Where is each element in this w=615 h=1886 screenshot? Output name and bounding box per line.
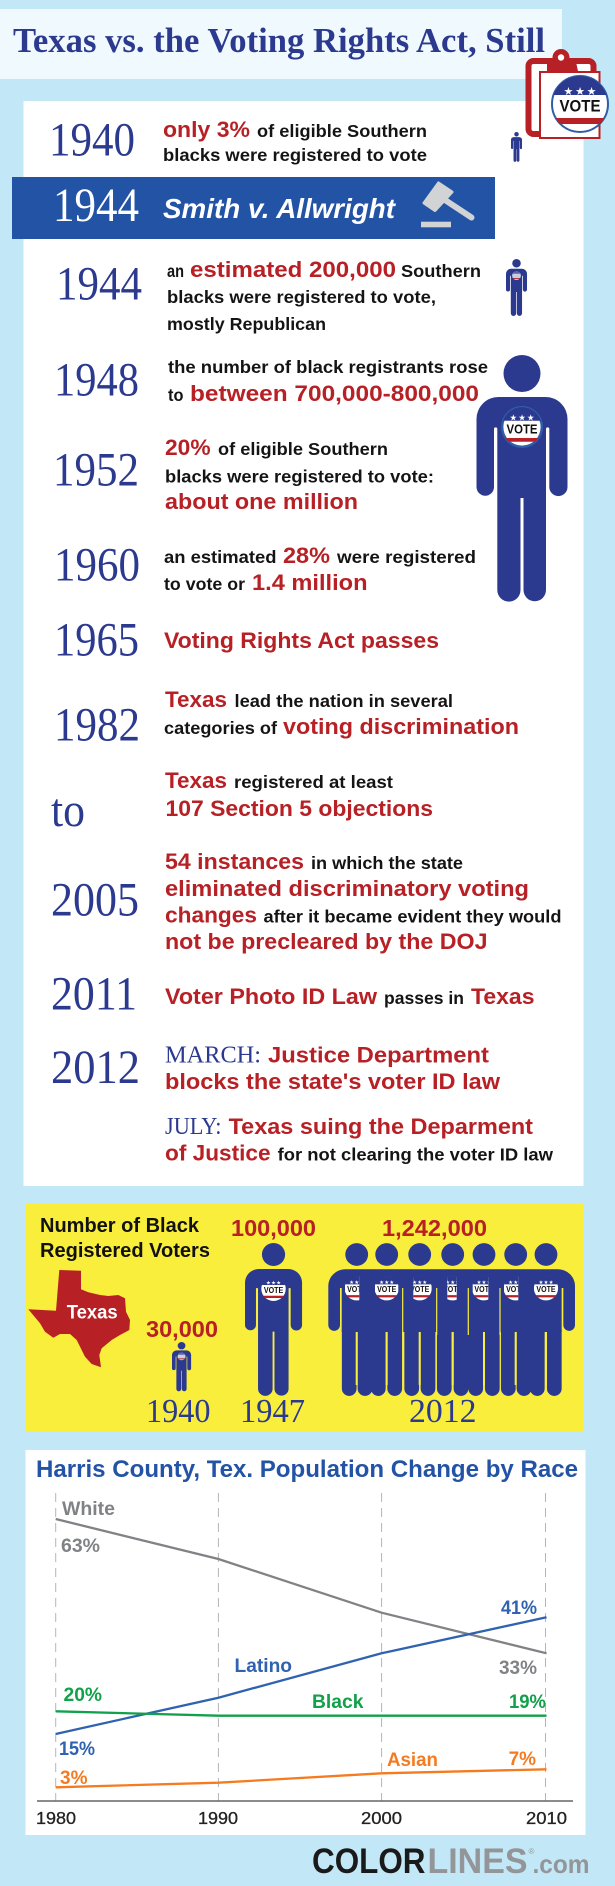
row: 1982 to 2005: to [51, 784, 85, 837]
row: 1952 [53, 435, 434, 514]
row: 1940 [49, 114, 427, 166]
figure: 1940 voters: 1940 [146, 1393, 210, 1430]
row: 2011: Texas [471, 984, 534, 1009]
logo: Colorlines [312, 1842, 590, 1881]
row: 1944: an [167, 261, 184, 281]
series: Black: Black [312, 1691, 364, 1713]
row: 1940: of eligible Southern [257, 121, 427, 141]
figure: 2012 voters: ★★★ [379, 1280, 394, 1286]
row: 1952: 20% [165, 435, 211, 460]
figure: 2012 voters: ★★★ [539, 1280, 554, 1286]
row: 1982 to 2005: categories of [164, 718, 277, 738]
row: 1982 to 2005: 107 Section 5 objections [166, 796, 433, 821]
row: 1952: blacks were registered to vote: [165, 467, 434, 487]
figure: 2012 voters: VOTE [474, 1285, 494, 1294]
x-axis labels: 2000 [361, 1808, 402, 1828]
series: White: White [62, 1498, 115, 1520]
row: 1982 to 2005: 2005 [51, 874, 139, 926]
panel: number of black registered voters [26, 1203, 584, 1432]
row: 1948: the number of black registrants rose [168, 357, 488, 377]
icon: vote clipboard: ★★★ [564, 85, 597, 98]
figure: 2012 voters: ★★★ [349, 1280, 364, 1286]
row: 1960: 28% [283, 543, 330, 568]
figure: 2012 voters: VOTE [536, 1285, 556, 1294]
banner: Smith v. Allwright: 1944 [53, 179, 139, 232]
banner: Smith v. Allwright [12, 177, 495, 239]
map: Texas: Texas [67, 1301, 118, 1323]
title banner [0, 9, 562, 79]
row: 2012 [51, 1041, 553, 1166]
row: 1944: blacks were registered to vote, [167, 287, 436, 307]
row: 1944: mostly Republican [167, 314, 326, 334]
series: White [56, 1498, 546, 1679]
figure: 2012 voters: 2012 [409, 1393, 476, 1430]
series: Black [56, 1684, 546, 1716]
map: Texas [28, 1270, 130, 1367]
figure: 2012 voters: VOTE [443, 1285, 463, 1294]
logo: Colorlines: LINES [428, 1842, 528, 1881]
figure: 2012 voters: VOTE [410, 1285, 430, 1294]
row: 1982 to 2005: changes [165, 903, 257, 928]
figure: 1947 voters: VOTE [264, 1286, 284, 1295]
row: 2011: passes in [384, 988, 464, 1008]
panel: Harris County line chart [26, 1450, 586, 1835]
row: 1952: 1952 [53, 444, 139, 496]
figure: 1940 voters [146, 1316, 218, 1430]
row: 1960: 1960 [54, 538, 140, 592]
row: 2012: for not clearing the voter ID law [278, 1145, 553, 1165]
series: Asian: Asian [387, 1749, 438, 1771]
row: 1982 to 2005: 1982 [54, 698, 140, 752]
row: 2012: blocks the state's voter ID law [165, 1069, 501, 1094]
logo: Colorlines: ® [528, 1847, 534, 1856]
figure: 1947 voters: 100,000 [231, 1215, 316, 1241]
row: 1960: were registered [336, 547, 476, 567]
row: 1982 to 2005: voting discrimination [283, 714, 519, 739]
series: White: 63% [61, 1535, 100, 1557]
icon: vote clipboard: VOTE [560, 97, 600, 116]
icon: large voter [476, 355, 568, 602]
row: 2012: MARCH: [165, 1043, 261, 1069]
row: 1982 to 2005: 54 instances [165, 849, 304, 874]
icon: large voter: VOTE [506, 421, 538, 436]
figure: 2012 voters: VOTE [377, 1285, 397, 1294]
row: 1960 [54, 538, 476, 595]
figure: 2012 voters: VOTE [347, 1285, 367, 1294]
row: 1982 to 2005: lead the nation in several [234, 691, 453, 711]
row: 1944: 1944 [56, 258, 142, 310]
row: 2011: 2011 [51, 968, 137, 1020]
logo: Colorlines: COLOR [312, 1842, 426, 1881]
figure: 2012 voters: VOTE [506, 1285, 526, 1294]
series: Latino: 15% [59, 1738, 95, 1760]
row: 2011: Voter Photo ID Law [165, 984, 378, 1009]
series: Black: 19% [509, 1691, 546, 1713]
icon: gavel [421, 183, 472, 227]
figure: 2012 voters: ★★★ [508, 1280, 523, 1286]
figure: 2012 voters: 1,242,000 [382, 1215, 487, 1241]
icon: large voter: ★★★ [510, 414, 535, 424]
icon: vote clipboard [528, 49, 608, 138]
series: Black: 20% [64, 1684, 102, 1706]
series: Asian [56, 1748, 546, 1789]
row: 1965: 1965 [54, 614, 139, 666]
row: 1982 to 2005: eliminated discriminatory voting [165, 876, 529, 901]
row: 1948: 1948 [54, 354, 139, 406]
row: 1982 to 2005: not be precleared by the DOJ [165, 929, 488, 954]
row: 1952: of eligible Southern [218, 439, 388, 459]
x-axis labels: 1980 [36, 1808, 76, 1828]
row: 2011 [51, 968, 534, 1020]
icon: small voter 1944 [506, 259, 527, 316]
row: 1982 to 2005: Texas [165, 768, 227, 793]
row: 1948: between 700,000-800,000 [190, 381, 479, 406]
row: 1944: Southern [401, 261, 481, 281]
row: 1960: to vote or [164, 574, 245, 594]
series: Latino: 41% [501, 1597, 537, 1619]
row: 1982 to 2005: Texas [165, 687, 227, 712]
row: 1948: to [168, 385, 184, 405]
x-axis labels: 2010 [526, 1808, 567, 1828]
row: 1960: an estimated [164, 547, 276, 567]
row: 1944: estimated 200,000 [190, 257, 396, 282]
x-axis labels [36, 1808, 567, 1828]
row: 2012: Texas suing the Deparment [229, 1114, 534, 1139]
figure: 1947 voters: 1947 [240, 1393, 305, 1430]
figure: 2012 voters [328, 1215, 575, 1430]
logo: Colorlines: .com [532, 1849, 590, 1879]
figure: 2012 voters: ★★★ [412, 1280, 427, 1286]
row: 1982 to 2005: registered at least [234, 772, 393, 792]
figure: 1947 voters: ★★★ [266, 1281, 281, 1287]
series: White: 33% [499, 1657, 537, 1679]
row: 1940: 1940 [49, 114, 135, 166]
icon: small voter 1940 [511, 132, 522, 162]
row: 1944 [56, 257, 481, 334]
series: Asian: 7% [509, 1748, 536, 1770]
row: 1948 [54, 354, 488, 406]
row: 2012: of Justice [165, 1141, 271, 1166]
title: Texas vs. the Voting Rights Act, Still [13, 21, 545, 60]
row: 1940: blacks were registered to vote [163, 145, 427, 165]
banner: Smith v. Allwright: Smith v. Allwright [163, 193, 397, 224]
heading: number of black registered voters: Number of Black [40, 1215, 200, 1237]
heading: number of black registered voters: Registered Voters [40, 1240, 210, 1262]
figure: 1947 voters [231, 1215, 316, 1430]
row: 2012: Justice Department [268, 1043, 490, 1068]
row: 2012: JULY: [165, 1114, 222, 1140]
series: Asian: 3% [60, 1767, 88, 1789]
figure: 2012 voters: ★★★ [477, 1280, 492, 1286]
heading: number of black registered voters [40, 1215, 210, 1262]
row: 1982 to 2005: after it became evident they would [264, 907, 562, 927]
row: 1982 to 2005 [51, 687, 562, 954]
panel: timeline [12, 101, 584, 1186]
row: 1940: only 3% [163, 117, 250, 142]
row: 1960: 1.4 million [252, 570, 368, 595]
figure: 2012 voters: ★★★ [445, 1280, 460, 1286]
row: 1965: Voting Rights Act passes [164, 628, 439, 653]
row: 1965 [54, 614, 439, 666]
figure: 1940 voters: 30,000 [146, 1316, 218, 1342]
chart title: Harris County, Tex. Population Change by Race [36, 1456, 578, 1483]
row: 1952: about one million [165, 489, 358, 514]
series: Latino [56, 1597, 546, 1760]
row: 1982 to 2005: in which the state [311, 853, 463, 873]
x-axis labels: 1990 [198, 1808, 238, 1828]
series: Latino: Latino [234, 1655, 292, 1677]
row: 2012: 2012 [51, 1041, 140, 1094]
